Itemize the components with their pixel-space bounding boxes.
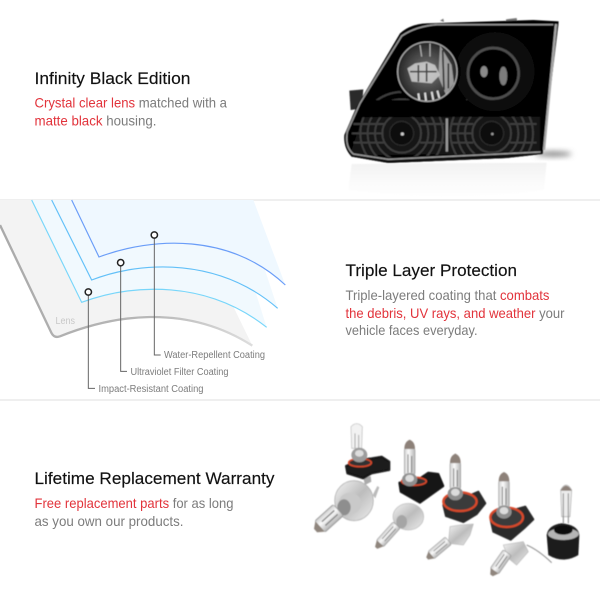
callout line: water-repellent — [151, 232, 161, 355]
heading: triple layer protection: Triple Layer Protection — [346, 261, 517, 280]
text block: coating description: the debris, UV rays, and weather your — [346, 305, 565, 321]
impact-resistant coating layer — [32, 200, 267, 327]
lens layer — [0, 200, 252, 346]
panel: lifetime replacement warranty text — [34, 469, 275, 529]
bulb: upper 3 — [443, 454, 485, 522]
text block: warranty description: Free replacement parts for as long — [34, 495, 234, 511]
callout line: ultraviolet filter — [117, 259, 127, 371]
label: ultraviolet filter coating: Ultraviolet Filter Coating — [130, 367, 228, 378]
bulb: upper 4 — [490, 472, 533, 540]
text block: lens description: Crystal clear lens matched with a — [34, 94, 227, 110]
bulb: lower 4 — [487, 542, 552, 578]
panel: triple layer protection text — [346, 261, 565, 338]
label: impact-resistant coating: Impact-Resistant Coating — [98, 384, 204, 395]
label: water-repellent coating: Water-Repellent Coating — [164, 350, 265, 361]
panel: infinity black edition text — [34, 69, 227, 128]
heading: lifetime replacement warranty: Lifetime Replacement Warranty — [34, 469, 275, 488]
text block: lens description: matte black housing. — [34, 112, 156, 128]
heading: infinity black edition: Infinity Black Edition — [34, 69, 190, 88]
headlight illustration — [343, 18, 574, 174]
text block: lens description — [34, 94, 227, 128]
text block: coating description — [346, 287, 565, 338]
text block: coating description: vehicle faces everyday. — [346, 322, 478, 338]
text block: coating description: Triple-layered coating that combats — [346, 287, 550, 303]
bulb: lower 3 — [424, 524, 473, 562]
bulb: upper 2 — [399, 440, 443, 503]
bulb: lower 2 — [373, 503, 424, 551]
bulb: lower 1 — [311, 481, 379, 536]
ultraviolet filter coating layer — [52, 200, 278, 308]
replacement bulbs photo — [311, 424, 579, 578]
bulb: upper 1 — [346, 424, 389, 485]
text block: warranty description — [34, 495, 234, 529]
water-repellent coating layer — [72, 200, 285, 285]
callout line: impact-resistant — [85, 289, 95, 388]
text block: warranty description: as you own our products. — [34, 513, 184, 529]
bulb: upper 5 — [547, 485, 579, 559]
label: lens: Lens — [56, 315, 75, 327]
diagram: triple layer lens cross-section — [0, 200, 285, 395]
